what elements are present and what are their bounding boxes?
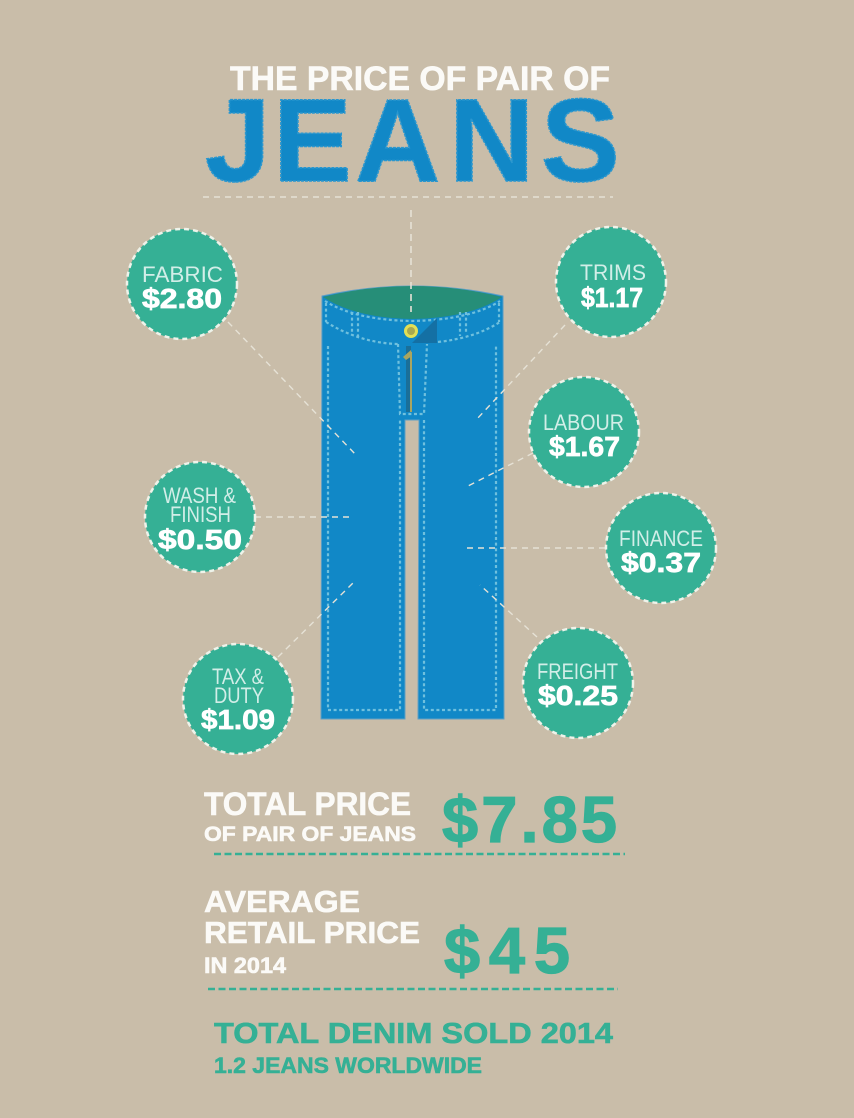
waistband stitching xyxy=(325,301,500,344)
stat: average retail price: RETAIL PRICE xyxy=(204,915,420,950)
bubble: labour: LABOUR xyxy=(543,410,624,435)
bubble: wash and finish xyxy=(145,462,255,572)
bubble: trims: TRIMS xyxy=(580,260,646,285)
bubble: wash and finish: $0.50 xyxy=(158,524,242,555)
icon: button xyxy=(404,324,418,338)
stat: average retail price xyxy=(204,884,570,987)
fly flap xyxy=(412,318,437,343)
bubble: finance xyxy=(606,493,716,603)
bubble: labour: $1.67 xyxy=(549,431,620,462)
bubble: freight: $0.25 xyxy=(538,680,618,711)
bubble: finance: FINANCE xyxy=(619,526,703,551)
illustration: jeans xyxy=(321,210,504,719)
stat: total price xyxy=(204,783,617,856)
bubble: fabric: FABRIC xyxy=(142,262,223,287)
centre stitch line xyxy=(410,210,412,312)
title line: the price of pair of: THE PRICE OF PAIR OF xyxy=(230,60,610,98)
leg stitching xyxy=(328,344,496,710)
bubble: wash and finish: FINISH xyxy=(170,502,231,527)
stat: total denim sold: 1.2 JEANS WORLDWIDE xyxy=(214,1053,482,1078)
stat: total denim sold: TOTAL DENIM SOLD 2014 xyxy=(214,1018,613,1050)
stat: total price: OF PAIR OF JEANS xyxy=(204,823,416,846)
stat: average retail price: AVERAGE xyxy=(204,884,360,919)
bubble: tax and duty: $1.09 xyxy=(201,704,275,735)
bubble: finance: $0.37 xyxy=(621,547,701,578)
bubble: fabric: $2.80 xyxy=(142,283,222,314)
stat: total price: TOTAL PRICE xyxy=(204,786,411,822)
bubble: fabric xyxy=(127,229,237,339)
bubble: freight xyxy=(523,628,633,738)
jeans body xyxy=(321,286,504,719)
bubble: freight: FREIGHT xyxy=(537,659,618,684)
bubble: trims: $1.17 xyxy=(581,282,643,313)
leader lines xyxy=(228,322,605,657)
waist opening xyxy=(323,286,502,319)
bubble: trims xyxy=(556,227,666,337)
stat: total denim sold xyxy=(214,1018,613,1078)
bubble: tax and duty xyxy=(183,644,293,754)
bubble: labour xyxy=(529,377,639,487)
stat: average retail price: IN 2014 xyxy=(204,953,287,978)
bubble: wash and finish: WASH & xyxy=(163,483,236,508)
bubble: tax and duty: DUTY xyxy=(214,683,264,708)
stat: average retail price: $45 xyxy=(444,914,570,987)
title xyxy=(205,60,620,207)
zip fly xyxy=(403,346,412,412)
stat: total price: $7.85 xyxy=(442,783,617,856)
title word: jeans: JEANS xyxy=(205,75,620,207)
bubble: tax and duty: TAX & xyxy=(212,664,264,689)
